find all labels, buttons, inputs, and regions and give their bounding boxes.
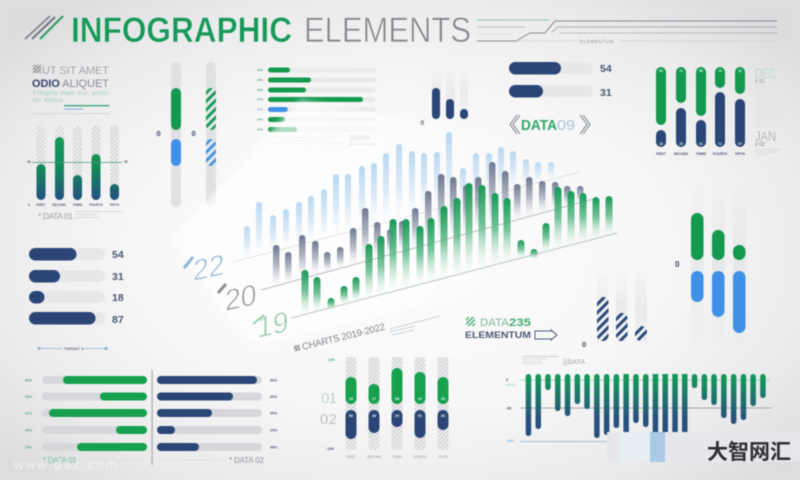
bar labels: 17% — [257, 108, 263, 112]
title circuit lines — [477, 20, 777, 44]
panel: right vertical diverging bars — [675, 184, 746, 347]
label: data235 elementum: ELEMENTUM — [465, 330, 531, 341]
pill values: 84 — [659, 69, 663, 73]
navy bars: 66% — [270, 395, 278, 399]
axis labels: 0 — [506, 378, 508, 382]
month labels: JAN — [755, 129, 776, 144]
panel: bottom right column chart — [506, 356, 772, 443]
axis labels: -50 — [506, 406, 512, 410]
gauge one — [171, 62, 181, 207]
legend: ▒DATA — [563, 358, 586, 366]
label: charts 2019-2022 — [293, 316, 440, 353]
column labels — [656, 152, 745, 156]
axis labels: -100 — [326, 446, 335, 451]
pill values: 38 — [372, 414, 376, 418]
axis labels: -100 — [506, 439, 514, 443]
icon: title slashes — [25, 16, 63, 39]
watermark: corner box — [607, 432, 800, 464]
pill values: 56 — [349, 414, 353, 418]
bar values — [112, 249, 124, 326]
month labels — [755, 65, 782, 155]
panel: left horizontal bars — [29, 248, 124, 351]
row 2019: green bars — [302, 183, 612, 314]
bar labels: 24% — [257, 128, 263, 132]
navy bars: 50% — [270, 412, 278, 416]
column labels: THIRD — [696, 152, 707, 156]
watermark: corner box: 大智网汇 — [707, 441, 791, 464]
navy bars: 24% — [270, 428, 278, 432]
row 2020: grey bars — [273, 162, 584, 286]
navy segments — [656, 92, 745, 147]
bar labels — [257, 68, 263, 132]
column labels: FIFTH — [110, 203, 120, 207]
column labels: FIRST — [656, 152, 667, 156]
bar labels: 14% — [257, 118, 263, 122]
icon: hatch square — [33, 65, 41, 73]
label: data09 — [510, 115, 590, 134]
pill values: 71 — [679, 69, 683, 73]
zero labels: 0 — [192, 129, 196, 138]
navy values — [432, 88, 468, 119]
column labels: 50 — [27, 160, 31, 164]
label: data235 elementum: 235 — [509, 317, 531, 329]
green bars: 70% — [25, 446, 33, 450]
pill values: 17 — [372, 397, 376, 401]
column labels: THIRD — [73, 203, 83, 207]
axis labels — [326, 357, 335, 451]
label: data 02: * DATA 02 — [229, 456, 265, 465]
title: infographic: INFOGRAPHIC — [71, 11, 292, 50]
pill values: 16 — [659, 142, 663, 146]
pill values: 74 — [718, 69, 722, 73]
column labels: FOURTH — [89, 203, 103, 207]
bar labels: 10% — [257, 68, 263, 72]
bar labels: 77% — [257, 98, 263, 102]
heading line two: ODIO ALIQUET — [32, 78, 109, 90]
pill values: 25 — [349, 397, 353, 401]
column labels: THIRD — [392, 455, 403, 459]
panel: small navy columns — [420, 68, 468, 127]
heading line one: UT SIT AMET — [42, 65, 109, 77]
month labels: DEC — [755, 65, 776, 81]
zero label: 0 — [420, 120, 424, 127]
series labels: 02 — [320, 411, 337, 428]
row 2022: blue bars — [244, 132, 554, 258]
title: elements: ELEMENTS — [304, 11, 471, 50]
column labels: SECOND — [52, 203, 67, 207]
column labels: FOURTH — [713, 152, 728, 156]
chart legend: ACTUAL YEARS — [349, 142, 376, 146]
panel: vertical gauges — [156, 62, 216, 207]
column labels: 0 — [28, 203, 30, 207]
panel: stacked pill chart top right — [656, 65, 782, 156]
pill values: 47 — [418, 397, 422, 401]
pill values: 91 — [738, 69, 742, 73]
hatched tracks — [346, 357, 448, 450]
zero labels: 0 — [156, 129, 161, 138]
panel: 3D isometric bars — [233, 132, 617, 318]
green segments — [656, 67, 745, 125]
green bars — [25, 376, 147, 451]
panel: bottom-left diverging bars — [25, 370, 278, 465]
faded tracks — [432, 68, 468, 120]
panel: gradient column chart — [27, 125, 128, 221]
pill values: 31 — [699, 142, 703, 146]
pill values — [659, 69, 742, 146]
column labels: FIFTH — [438, 455, 448, 459]
watermark: site url: www.daz.com — [13, 457, 117, 472]
label: data09: 09 — [557, 118, 575, 134]
label: charts 2019-2022: CHARTS 2019-2022 — [301, 322, 386, 353]
panel: horizontal bars top centre — [257, 68, 376, 146]
bar tracks — [268, 68, 376, 132]
panel: top-left text block — [32, 65, 110, 114]
zero label: 0 — [675, 260, 680, 269]
green bars: 91% — [25, 412, 33, 416]
label: data235 elementum — [465, 317, 557, 341]
bar values: 87 — [112, 314, 124, 326]
value: 31: 31 — [600, 87, 612, 99]
body text second line: tor metus — [33, 97, 63, 104]
column labels: SECOND — [674, 152, 689, 156]
label: elementum: ELEMENTUM — [580, 39, 613, 44]
axis labels — [506, 378, 516, 443]
bar labels: 35% — [257, 88, 263, 92]
pill values — [349, 397, 445, 418]
green bars: 84% — [25, 378, 33, 382]
navy bars — [157, 376, 278, 451]
title — [25, 11, 471, 50]
chart legend: ▒DATA — [349, 134, 371, 142]
pill values: 51 — [418, 414, 422, 418]
month labels: # 01 — [755, 79, 765, 85]
year label: 22: 22 — [193, 248, 225, 288]
panel: hatched small columns — [582, 270, 647, 349]
label: data 01: * DATA 01 — [43, 456, 78, 465]
series labels: 01 — [321, 390, 337, 407]
column labels — [346, 455, 448, 459]
zero labels — [156, 129, 196, 138]
columns — [526, 374, 766, 438]
label: data09: DATA — [521, 118, 557, 134]
bar values: 54 — [112, 249, 124, 261]
value: 54: 54 — [600, 63, 612, 75]
column labels: FIRST — [346, 455, 356, 459]
bar values — [268, 68, 363, 132]
pill values: 39 — [441, 397, 445, 401]
pill values: 67 — [738, 142, 742, 146]
column labels: 50 — [124, 160, 128, 164]
legend — [522, 356, 586, 366]
green segments — [346, 368, 448, 404]
green bars: 53% — [25, 395, 33, 399]
column labels: FIRST — [36, 203, 46, 207]
navy segments — [346, 410, 448, 439]
month labels: # 02 — [755, 142, 765, 148]
bar values: 18 — [112, 292, 124, 304]
label: data235 elementum: DATA — [480, 317, 510, 329]
column labels: FIFTH — [735, 152, 745, 156]
column values — [36, 137, 119, 200]
panel: top right horizontal bars — [509, 62, 612, 99]
axis labels: 100% — [506, 383, 516, 387]
column tracks — [36, 125, 119, 200]
body text: Fringilla diam nisi, portti- — [33, 90, 110, 97]
series labels — [320, 390, 337, 428]
bar labels: 40% — [257, 78, 263, 82]
accent lines — [32, 105, 110, 114]
axis labels: 100 — [328, 357, 335, 362]
bar values: 31 — [112, 271, 124, 283]
pill values: 71 — [718, 142, 722, 146]
column labels — [27, 160, 128, 207]
target scale: TARGET 1 — [64, 346, 84, 351]
icon: outline arrow — [535, 330, 557, 340]
column labels: FOURTH — [413, 455, 427, 459]
year label: 19: 19 — [257, 305, 289, 345]
green bars: 30% — [25, 428, 33, 432]
pill values: 29 — [395, 414, 399, 418]
pill values: 88 — [699, 69, 703, 73]
pill values: 30 — [441, 414, 445, 418]
pill values: 68 — [395, 397, 399, 401]
panel: bottom centre pill chart — [320, 357, 448, 459]
panel: isometric chart backdrop — [172, 100, 560, 345]
zero label: 0 — [582, 340, 586, 349]
gauge two — [206, 62, 216, 207]
navy bars: 45% — [270, 446, 278, 450]
label: data 01: * DATA 01 — [38, 211, 73, 221]
navy bars: 96% — [270, 378, 278, 382]
pill values: 29 — [679, 142, 683, 146]
reference lines — [520, 380, 772, 442]
year label: 20: 20 — [225, 278, 257, 318]
chart legend — [272, 134, 376, 146]
column labels: SECOND — [367, 455, 382, 459]
